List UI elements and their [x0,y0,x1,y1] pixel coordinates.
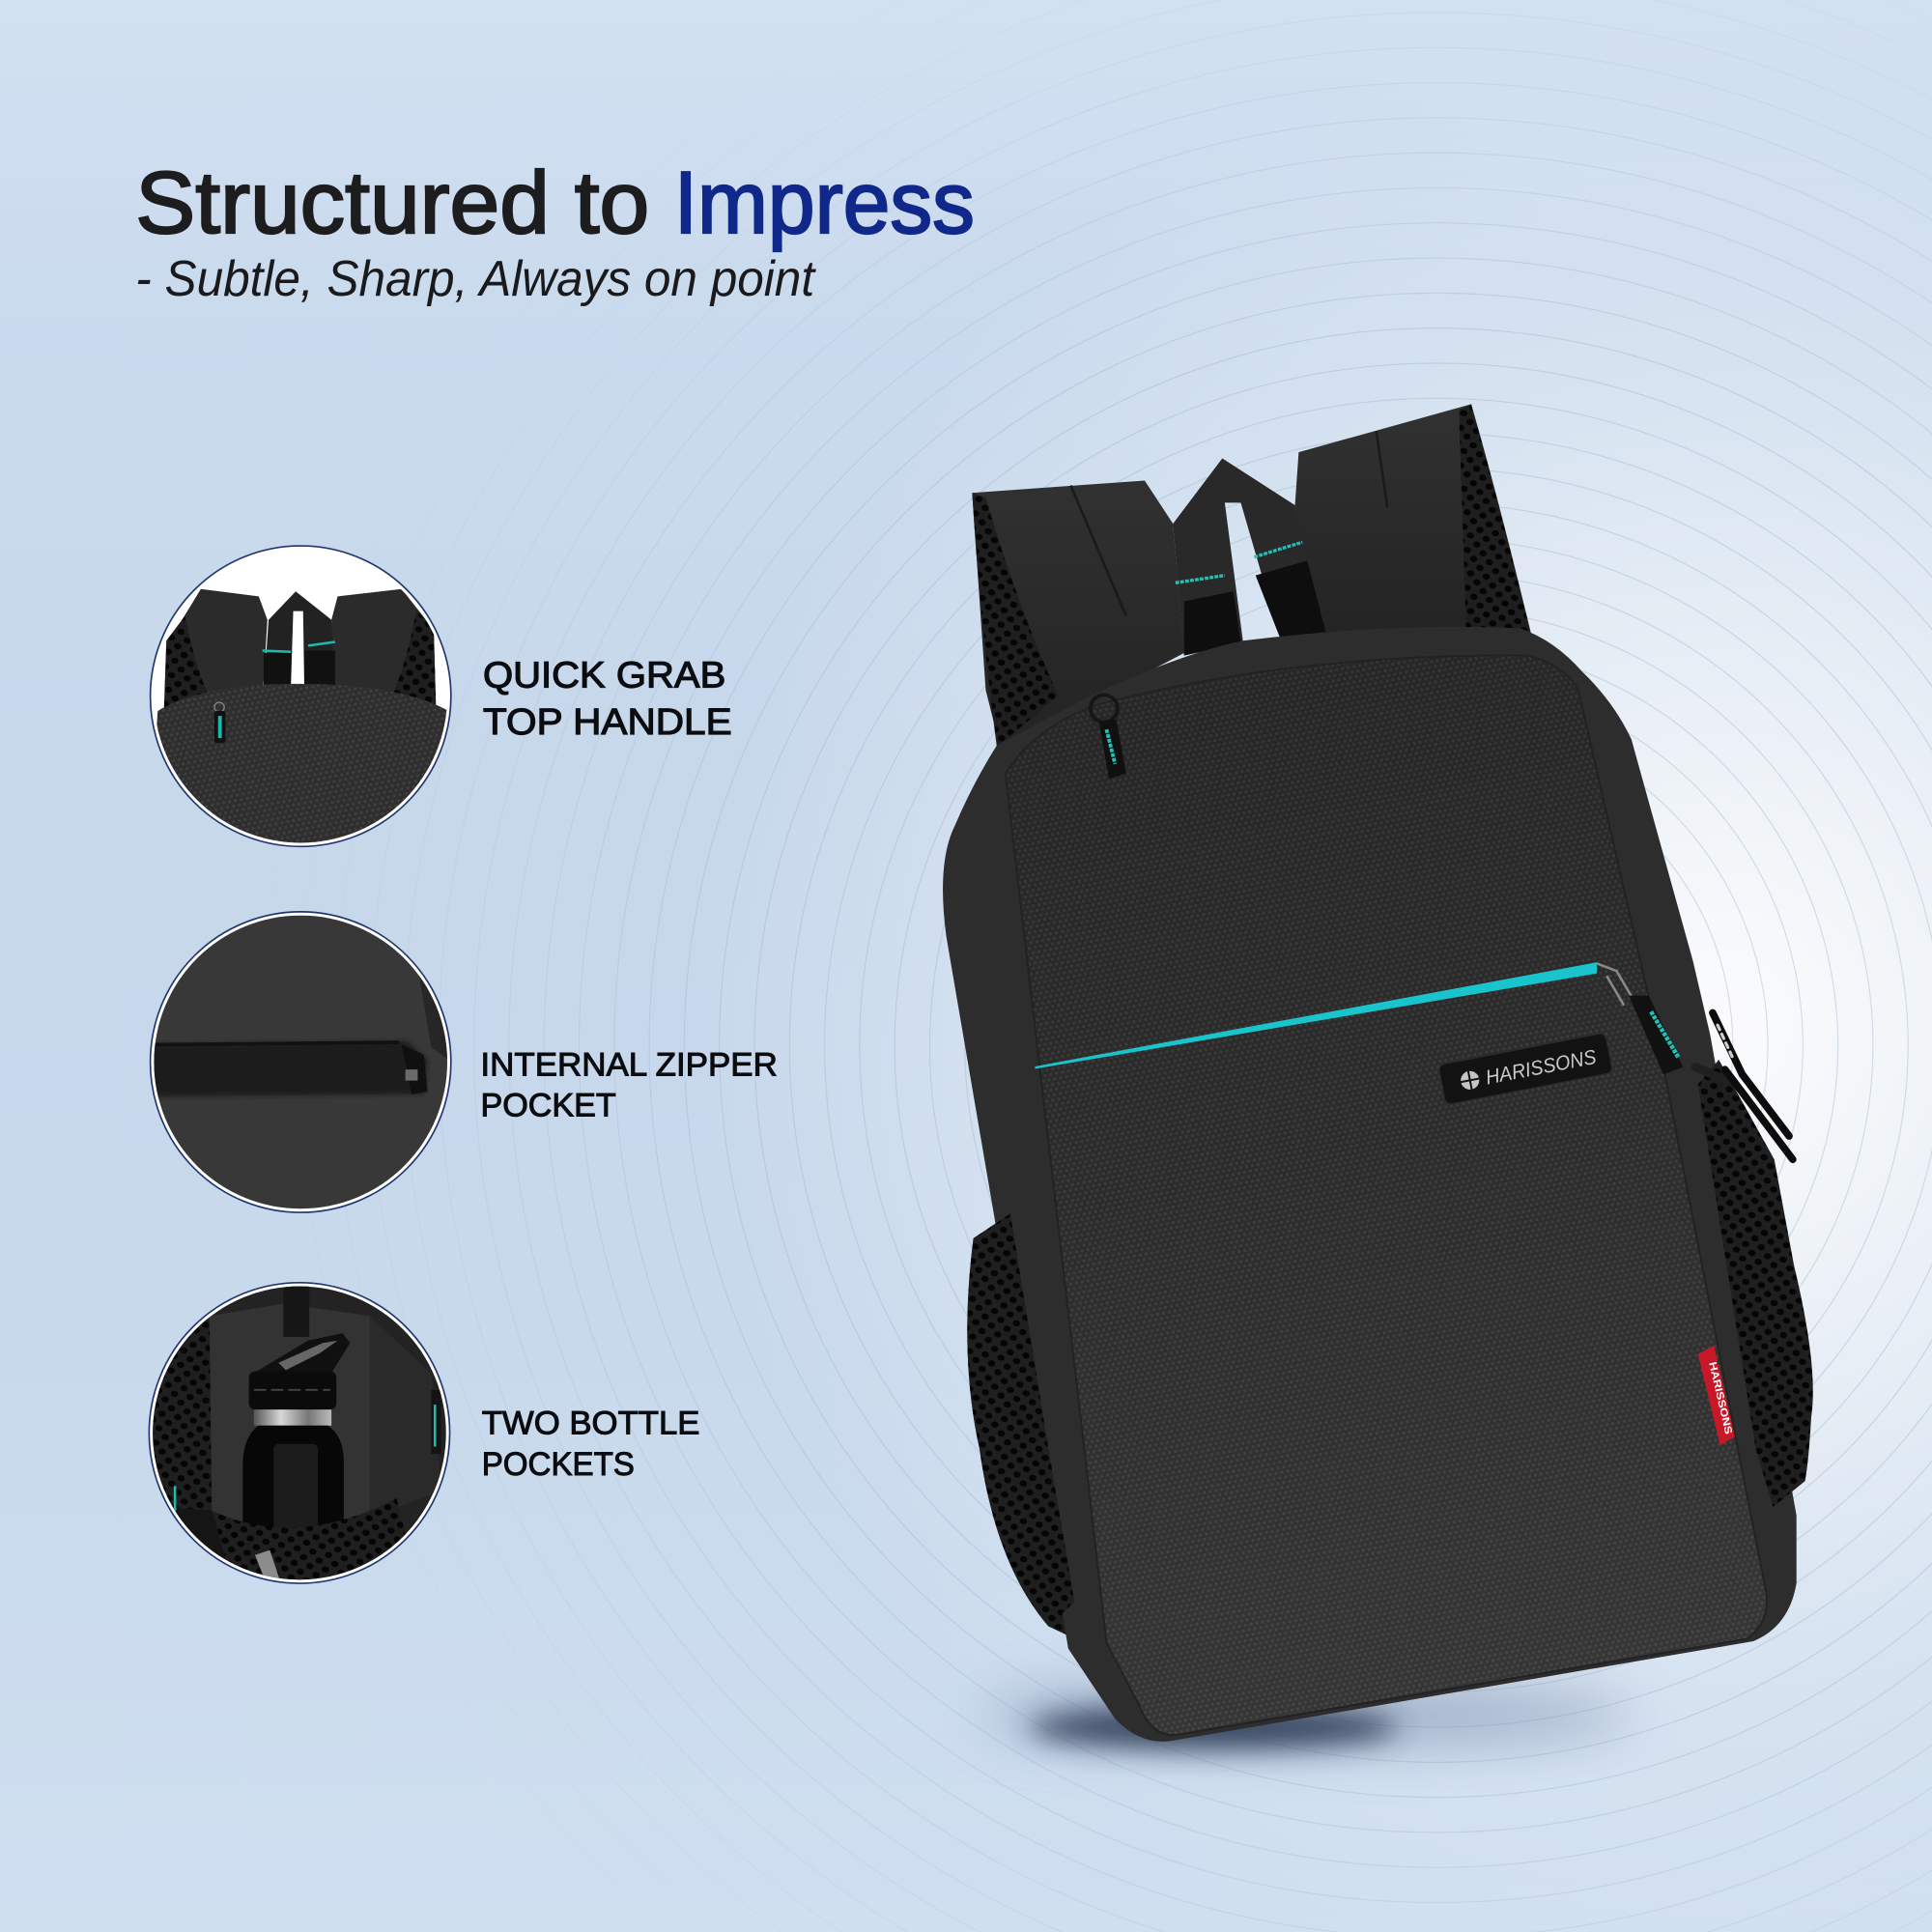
infographic canvas [137,168,1813,1777]
label: POCKET [480,1088,616,1124]
title: Impress [674,155,975,252]
front zipper pull [1597,963,1683,1074]
backpack [943,404,1813,1742]
side mesh pocket: right [1698,1060,1813,1507]
label: POCKETS [482,1446,635,1483]
label: TWO BOTTLE [482,1406,699,1442]
circle base [151,912,451,1212]
side mesh pocket: left [967,1213,1088,1645]
red tag: HARISSONS [1706,1361,1734,1435]
detail photo: top handle [156,589,446,842]
side zipper pulls [1695,1012,1793,1159]
brand patch [1438,1033,1613,1105]
teal zipper stripe [1035,962,1597,1069]
circle base [149,1283,450,1583]
feature: two bottle pockets [148,1282,699,1589]
top handle [1173,458,1325,656]
main body [943,627,1797,1742]
label [482,1406,699,1483]
right shoulder strap [1295,404,1533,647]
red tag [1698,1346,1735,1445]
detail photo: bottle pocket [148,1282,456,1589]
left mesh over body [967,1213,1074,1627]
feature: quick grab top handle [148,546,732,863]
bag shadow [980,1686,1633,1749]
title [135,155,975,252]
detail photo: zipper pocket [148,912,456,1220]
title: Structured to [135,155,649,252]
label [483,655,732,742]
brand patch: HARISSONS [1484,1046,1598,1090]
top zipper pull [1091,695,1126,779]
label: TOP HANDLE [483,701,732,742]
left shoulder strap [972,480,1184,750]
label: INTERNAL ZIPPER [480,1047,778,1084]
circle base [151,546,451,846]
front panel [1006,655,1767,1735]
feature: internal zipper pocket [148,912,778,1220]
label: QUICK GRAB [483,655,725,696]
subtitle: - Subtle, Sharp, Always on point [135,251,816,307]
label [480,1047,778,1124]
